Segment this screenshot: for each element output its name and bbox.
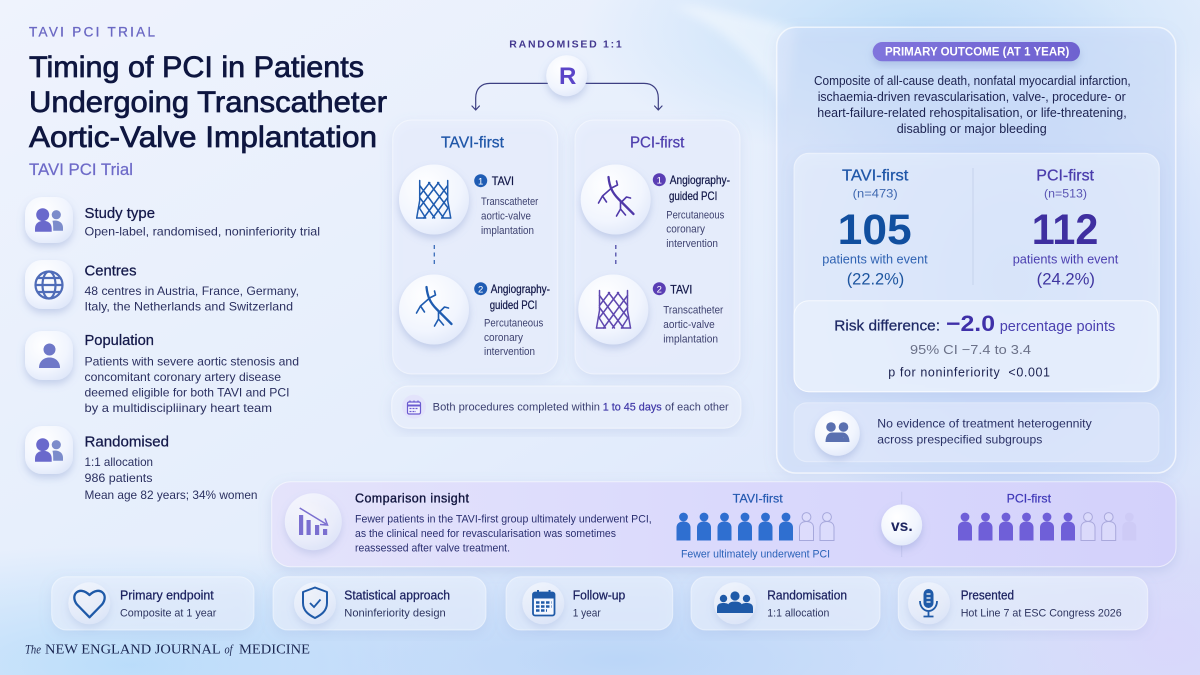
- journal logo: MEDICINE: [239, 641, 310, 656]
- result: TAVI-first: TAVI-first: [842, 168, 909, 185]
- step 1 text: Angiography-: [670, 173, 730, 187]
- journal logo: of: [224, 641, 234, 656]
- step 2 text: [653, 282, 724, 346]
- icon: coronary vessels: [399, 274, 469, 344]
- pictogram: TAVI-first: TAVI-first: [733, 492, 783, 506]
- insight text: as the clinical need for revascularisation was sometimes: [355, 528, 616, 540]
- step 1 text: intervention: [666, 238, 718, 250]
- card: follow-up: [506, 577, 673, 630]
- item: randomised: Randomised: [84, 434, 169, 451]
- outcome definition: Composite of all-cause death, nonfatal myocardial infarction,: [814, 74, 1131, 88]
- item: randomised: Mean age 82 years; 34% women: [84, 488, 258, 502]
- step 1 text: implantation: [481, 225, 534, 237]
- risk difference box: [794, 301, 1158, 392]
- outcome definition: heart-failure-related rehospitalisation, or life-threatening,: [817, 106, 1127, 120]
- step 1 text: 1: [478, 176, 483, 187]
- outcome definition: ischaemia-driven revascularisation, valve-, procedure- or: [818, 90, 1126, 104]
- step 2 text: aortic-valve: [663, 319, 715, 331]
- item: population: Patients with severe aortic stenosis and: [84, 355, 299, 369]
- card: primary endpoint: [52, 577, 254, 630]
- card: primary endpoint: Primary endpoint: [120, 588, 214, 602]
- item: centres: Italy, the Netherlands and Switzerland: [84, 300, 293, 314]
- step 2 text: intervention: [484, 346, 535, 358]
- header: eyebrow, title, subtitle: [29, 25, 387, 179]
- step 2 text: TAVI: [670, 282, 692, 296]
- journal logo: NEW ENGLAND JOURNAL: [45, 641, 221, 656]
- arrows: [472, 83, 662, 110]
- outcome definition: disabling or major bleeding: [897, 122, 1047, 136]
- arm heading: PCI-first: [630, 134, 685, 151]
- result: PCI-first: [1013, 168, 1119, 288]
- panel: primary outcome: [777, 27, 1176, 473]
- card: statistical approach: [273, 577, 486, 630]
- item: randomised: 986 patients: [84, 471, 152, 485]
- title: [29, 51, 387, 154]
- result: PCI-first: 112: [1032, 206, 1098, 254]
- step 1 text: aortic-valve: [481, 210, 531, 222]
- subgroup note: across prespecified subgroups: [877, 432, 1042, 446]
- result: PCI-first: PCI-first: [1036, 168, 1095, 185]
- outcome definition: [814, 74, 1131, 136]
- randomisation header with arrows: [472, 39, 662, 110]
- step 2 text: coronary: [484, 332, 523, 344]
- connector: [615, 245, 617, 266]
- pictogram: PCI-first: PCI-first: [1007, 492, 1052, 506]
- icon: valve stent: [399, 164, 469, 234]
- callout: procedure window: [392, 386, 741, 428]
- connector: [433, 245, 435, 266]
- icon: valve stent: [578, 274, 648, 344]
- callout: procedure window: Both procedures completed within: [433, 402, 600, 414]
- step 2 text: Transcatheter: [663, 305, 724, 317]
- footer cards: [52, 577, 1148, 630]
- item: population: deemed eligible for both TAVI and PCI: [84, 386, 290, 400]
- journal logo: The: [25, 641, 41, 656]
- study info list: [25, 197, 320, 502]
- step 1 text: guided PCI: [669, 189, 717, 203]
- insight text: Comparison insight: [355, 492, 470, 506]
- risk difference box: −2.0: [946, 311, 995, 336]
- step 1 text: [653, 173, 730, 250]
- step 1 text: 1: [657, 175, 662, 186]
- subgroup note: No evidence of treatment heterogennity: [877, 416, 1092, 430]
- result: TAVI-first: (22.2%): [847, 270, 904, 288]
- result: PCI-first: patients with event: [1013, 251, 1119, 266]
- icon: coronary vessels: [581, 164, 651, 234]
- result: TAVI-first: 105: [838, 206, 912, 254]
- risk difference box: percentage points: [1000, 319, 1115, 335]
- divider and versus badge: vs.: [891, 518, 913, 535]
- panel: TAVI-first arm: [393, 120, 558, 374]
- item: population: concomitant coronary artery disease: [84, 370, 281, 384]
- icon: calendar: [402, 395, 426, 419]
- card: randomisation: Randomisation: [767, 588, 847, 602]
- step 2 text: guided PCI: [490, 298, 537, 312]
- journal logo: [25, 641, 310, 656]
- card: follow-up: 1 year: [573, 608, 601, 620]
- results panel: [794, 153, 1159, 392]
- outcome pill: [873, 42, 1080, 61]
- item: population: Population: [84, 332, 154, 349]
- result: TAVI-first: (n=473): [853, 187, 898, 201]
- panel: comparison insight: [272, 482, 1176, 567]
- result: TAVI-first: patients with event: [822, 251, 928, 266]
- insight text: Fewer patients in the TAVI-first group ultimately underwent PCI,: [355, 513, 652, 525]
- step 2 text: 2: [478, 284, 483, 295]
- item: study type: Open-label, randomised, noninferiority trial: [84, 225, 320, 239]
- R circle: [546, 55, 587, 96]
- card: primary endpoint: Composite at 1 year: [120, 608, 217, 620]
- insight text: reassessed after valve treatment.: [355, 543, 510, 555]
- pictogram: PCI-first: [958, 492, 1136, 540]
- step 1 text: TAVI: [492, 174, 514, 188]
- card: follow-up: Follow-up: [573, 588, 625, 602]
- insight text: [355, 492, 652, 555]
- risk difference box: p for noninferiority <0.001: [888, 366, 1050, 380]
- result: PCI-first: (24.2%): [1037, 270, 1095, 288]
- label: randomised 1:1: RANDOMISED 1:1: [509, 39, 622, 51]
- card: randomisation: 1:1 allocation: [767, 608, 829, 620]
- card: statistical approach: Noninferiority design: [344, 608, 446, 620]
- item: randomised: 1:1 allocation: [84, 455, 153, 469]
- step 2 text: implantation: [663, 334, 718, 346]
- step 1 text: [474, 174, 539, 237]
- step 1 text: coronary: [666, 224, 705, 236]
- card: presented: [898, 577, 1148, 630]
- item: centres: 48 centres in Austria, France, Germany,: [84, 284, 299, 298]
- result: PCI-first: (n=513): [1044, 187, 1087, 201]
- item: study type: [25, 197, 320, 243]
- card: presented: Hot Line 7 at ESC Congress 2026: [961, 608, 1122, 620]
- title: Aortic-Valve Implantation: [29, 121, 377, 154]
- arm heading: TAVI-first: [441, 134, 505, 151]
- card: statistical approach: Statistical approach: [344, 588, 450, 602]
- item: randomised: [25, 426, 258, 502]
- result: TAVI-first: [822, 168, 928, 288]
- item: population: [25, 331, 299, 415]
- panel: PCI-first arm: [575, 120, 740, 374]
- outcome pill: PRIMARY OUTCOME (AT 1 YEAR): [885, 47, 1069, 59]
- risk difference box: 95% CI −7.4 to 3.4: [910, 342, 1031, 357]
- item: population: by a multidiscipliinary heart team: [84, 401, 272, 415]
- step 2 text: Angiography-: [491, 282, 550, 296]
- eyebrow: TAVI PCI TRIAL: [29, 25, 155, 40]
- callout: procedure window: 1 to 45 days: [603, 402, 662, 414]
- risk difference box: Risk difference:: [834, 319, 940, 335]
- pictogram: TAVI-first: Fewer ultimately underwent PCI: [681, 548, 830, 560]
- subgroup note: [794, 403, 1159, 462]
- step 2 text: Percutaneous: [484, 318, 544, 330]
- icon: declining bars: [285, 493, 342, 550]
- title: Undergoing Transcatheter: [29, 86, 387, 119]
- card: presented: Presented: [961, 588, 1014, 602]
- item: centres: [25, 260, 299, 314]
- card: randomisation: [691, 577, 880, 630]
- pictogram: TAVI-first: [676, 492, 834, 560]
- callout: procedure window: of each other: [665, 402, 729, 414]
- R circle: R: [559, 63, 576, 90]
- subtitle: TAVI PCI Trial: [29, 161, 133, 179]
- step 1 text: Transcatheter: [481, 196, 539, 208]
- title: Timing of PCI in Patients: [29, 51, 364, 84]
- item: study type: Study type: [84, 205, 155, 222]
- divider and versus badge: [881, 492, 922, 557]
- step 1 text: Percutaneous: [666, 209, 725, 221]
- step 2 text: 2: [657, 284, 662, 295]
- step 2 text: [474, 282, 550, 358]
- item: centres: Centres: [84, 263, 136, 280]
